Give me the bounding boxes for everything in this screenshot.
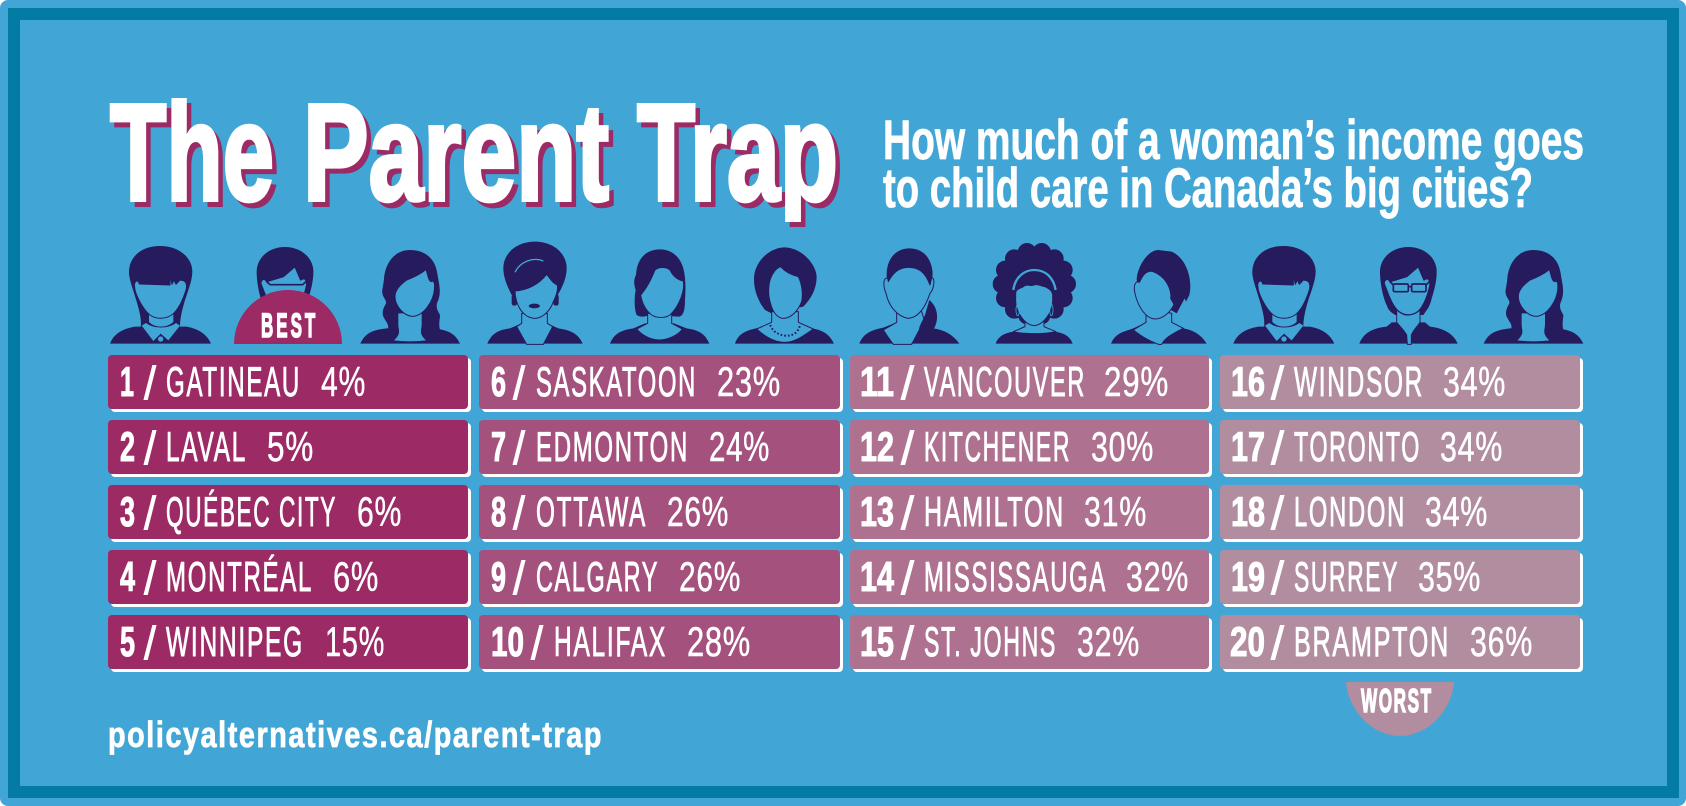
footer url: policyalternatives.ca/parent-trap <box>108 714 603 755</box>
column 2: rank 6 to 10 <box>479 355 843 672</box>
row: Hamilton: HAMILTON <box>924 488 1065 535</box>
row: Gatineau: 4% <box>321 358 366 405</box>
row: Brampton: 36% <box>1470 618 1533 665</box>
row: Laval: LAVAL <box>166 423 247 470</box>
avatar 7 <box>859 248 959 344</box>
row: St. Johns <box>850 615 1212 672</box>
row: Hamilton: / <box>901 487 914 539</box>
row: Toronto: 34% <box>1440 423 1503 470</box>
row: St. Johns: / <box>901 617 914 669</box>
row: Windsor <box>1220 355 1583 412</box>
row: Halifax <box>479 615 843 672</box>
row: Kitchener: 12 <box>860 423 894 470</box>
avatar 2 <box>236 247 334 344</box>
row: Québec City <box>108 485 471 542</box>
row: Winnipeg: 15% <box>325 618 385 665</box>
row: Vancouver: VANCOUVER <box>924 358 1086 405</box>
row: Calgary: 9 <box>491 553 506 600</box>
row: St. Johns: ST. JOHNS <box>924 618 1057 665</box>
title: Parent <box>303 76 609 230</box>
row: Saskatoon <box>479 355 843 412</box>
row: London: LONDON <box>1294 488 1406 535</box>
row: Québec City: 6% <box>357 488 402 535</box>
row: Toronto: TORONTO <box>1294 423 1421 470</box>
row: Calgary: / <box>513 552 525 604</box>
row: London: 34% <box>1425 488 1488 535</box>
row: Kitchener: KITCHENER <box>924 423 1071 470</box>
title <box>110 98 840 227</box>
row: Vancouver <box>850 355 1212 412</box>
avatar 9 <box>1111 250 1207 344</box>
row: Windsor: 16 <box>1231 358 1265 405</box>
row: St. Johns: 32% <box>1077 618 1140 665</box>
title: The <box>110 76 274 230</box>
row: Windsor: 34% <box>1443 358 1506 405</box>
row: Saskatoon: 6 <box>491 358 506 405</box>
row: Halifax: 28% <box>687 618 751 665</box>
row: Saskatoon: 23% <box>717 358 781 405</box>
column 4: rank 16 to 20 <box>1220 355 1583 672</box>
row: Vancouver: 11 <box>860 358 894 405</box>
row: Gatineau: 1 <box>120 358 134 405</box>
row: Calgary: CALGARY <box>536 553 659 600</box>
badge: worst <box>1346 682 1454 736</box>
row: Montréal: MONTRÉAL <box>166 553 313 600</box>
row: Winnipeg: / <box>144 617 156 669</box>
title: Parent <box>308 81 614 235</box>
row: Windsor: / <box>1271 357 1284 409</box>
row: Montréal: / <box>144 552 156 604</box>
row: London: / <box>1271 487 1284 539</box>
row: St. Johns: 15 <box>860 618 894 665</box>
badge: best: BEST <box>261 307 318 345</box>
subtitle <box>883 108 1584 219</box>
row: Mississauga: 14 <box>860 553 894 600</box>
row: Edmonton <box>479 420 843 477</box>
column 1: rank 1 to 5 <box>108 355 471 672</box>
row: Surrey: 19 <box>1231 553 1265 600</box>
row: Gatineau: GATINEAU <box>166 358 301 405</box>
row: Laval <box>108 420 471 477</box>
row: Hamilton <box>850 485 1212 542</box>
row: London <box>1220 485 1583 542</box>
row: Laval: 5% <box>267 423 314 470</box>
row: Ottawa: OTTAWA <box>536 488 647 535</box>
row: Surrey: / <box>1271 552 1284 604</box>
title: Trap <box>637 76 838 230</box>
row: Ottawa: / <box>513 487 525 539</box>
title: Trap <box>642 81 842 235</box>
avatar 5 <box>610 249 709 344</box>
row: Toronto: 17 <box>1231 423 1265 470</box>
row: Toronto <box>1220 420 1583 477</box>
row: Québec City: / <box>144 487 156 539</box>
row: Edmonton: 24% <box>709 423 770 470</box>
avatar 4 <box>487 242 583 344</box>
row: Saskatoon: / <box>513 357 525 409</box>
row: Brampton: 20 <box>1230 618 1265 665</box>
row: Surrey <box>1220 550 1583 607</box>
row: Vancouver: / <box>901 357 914 409</box>
row: Halifax: / <box>531 617 543 669</box>
column 3: rank 11 to 15 <box>850 355 1212 672</box>
badge: worst: WORST <box>1361 682 1433 720</box>
row: Surrey: SURREY <box>1294 553 1399 600</box>
row: Winnipeg: WINNIPEG <box>166 618 304 665</box>
row: Edmonton: / <box>513 422 525 474</box>
row: Montréal: 4 <box>120 553 135 600</box>
row: Toronto: / <box>1271 422 1284 474</box>
row: Winnipeg <box>108 615 471 672</box>
badge: best <box>234 290 342 345</box>
row: Mississauga: / <box>901 552 914 604</box>
row: Vancouver: 29% <box>1104 358 1169 405</box>
row: Laval: / <box>144 422 156 474</box>
row: Brampton: / <box>1271 617 1284 669</box>
avatar 12 <box>1484 250 1583 344</box>
row: Ottawa: 26% <box>667 488 729 535</box>
row: Montréal: 6% <box>333 553 379 600</box>
row: Windsor: WINDSOR <box>1294 358 1424 405</box>
row: Hamilton: 13 <box>860 488 894 535</box>
row: Brampton <box>1220 615 1583 672</box>
avatar 3 <box>360 250 460 344</box>
row: Gatineau: / <box>144 357 156 409</box>
row: Halifax: HALIFAX <box>554 618 667 665</box>
row: Laval: 2 <box>120 423 135 470</box>
row: Kitchener <box>850 420 1212 477</box>
row: Hamilton: 31% <box>1084 488 1147 535</box>
avatar 1 <box>110 246 211 344</box>
row: Kitchener: / <box>901 422 914 474</box>
row: Brampton: BRAMPTON <box>1294 618 1450 665</box>
row: Kitchener: 30% <box>1091 423 1154 470</box>
avatar 8 <box>993 243 1076 344</box>
row: London: 18 <box>1231 488 1265 535</box>
row: Ottawa <box>479 485 843 542</box>
row: Mississauga: 32% <box>1126 553 1189 600</box>
row: Surrey: 35% <box>1418 553 1481 600</box>
row: Mississauga <box>850 550 1212 607</box>
row: Gatineau <box>108 355 471 412</box>
row: Québec City: 3 <box>120 488 135 535</box>
row: Winnipeg: 5 <box>120 618 135 665</box>
title: The <box>114 81 278 235</box>
row: Halifax: 10 <box>491 618 524 665</box>
avatar 10 <box>1233 246 1334 344</box>
row: Calgary <box>479 550 843 607</box>
row: Edmonton: 7 <box>491 423 506 470</box>
row: Ottawa: 8 <box>491 488 506 535</box>
row: Mississauga: MISSISSAUGA <box>924 553 1107 600</box>
avatar 6 <box>735 247 834 344</box>
avatar 11 <box>1359 247 1458 344</box>
row: Calgary: 26% <box>679 553 741 600</box>
row: Montréal <box>108 550 471 607</box>
row: Saskatoon: SASKATOON <box>536 358 697 405</box>
row: Québec City: QUÉBEC CITY <box>166 488 337 535</box>
row: Edmonton: EDMONTON <box>536 423 689 470</box>
